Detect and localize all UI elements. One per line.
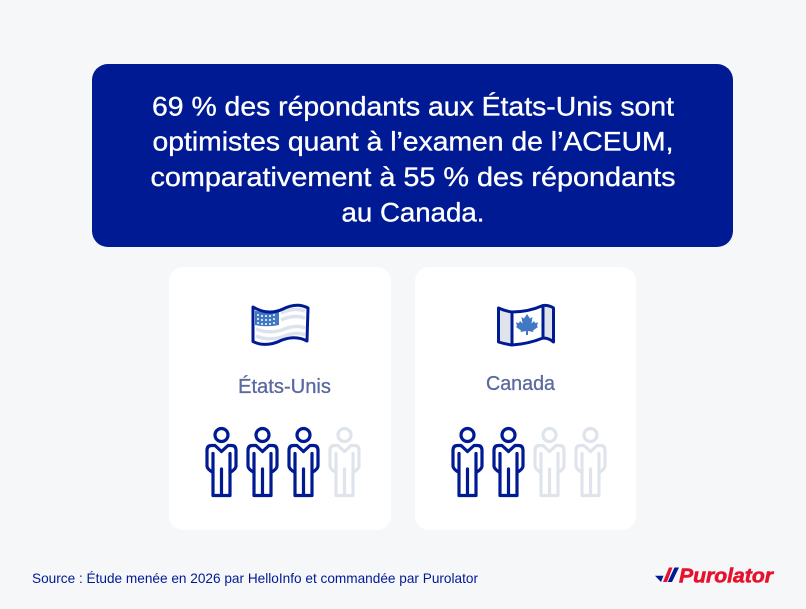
source note: Source : Étude menée en 2026 par HelloInfo et commandée par Purolator xyxy=(32,570,478,586)
headline text: 69 % des répondants aux États-Unis sont xyxy=(152,92,675,122)
logo: Purolator xyxy=(655,564,774,588)
headline text: au Canada. xyxy=(342,198,484,228)
headline text xyxy=(150,92,676,228)
icon: Canadian flag xyxy=(498,305,554,345)
pictogram: 2 of 4 people xyxy=(453,428,605,496)
headline text: optimistes quant à l’examen de l’ACEUM, xyxy=(152,126,674,156)
pictogram: 3 of 4 people xyxy=(207,428,359,496)
logo mark xyxy=(655,568,679,582)
panel: Canada xyxy=(415,267,636,530)
label: États-Unis: États-Unis xyxy=(238,375,331,398)
label: Canada: Canada xyxy=(486,373,556,395)
headline text: comparativement à 55 % des répondants xyxy=(150,162,676,192)
panel: États-Unis xyxy=(169,267,391,530)
icon: US flag xyxy=(253,305,308,344)
logo wordmark: Purolator xyxy=(679,564,774,588)
headline banner xyxy=(92,64,733,247)
